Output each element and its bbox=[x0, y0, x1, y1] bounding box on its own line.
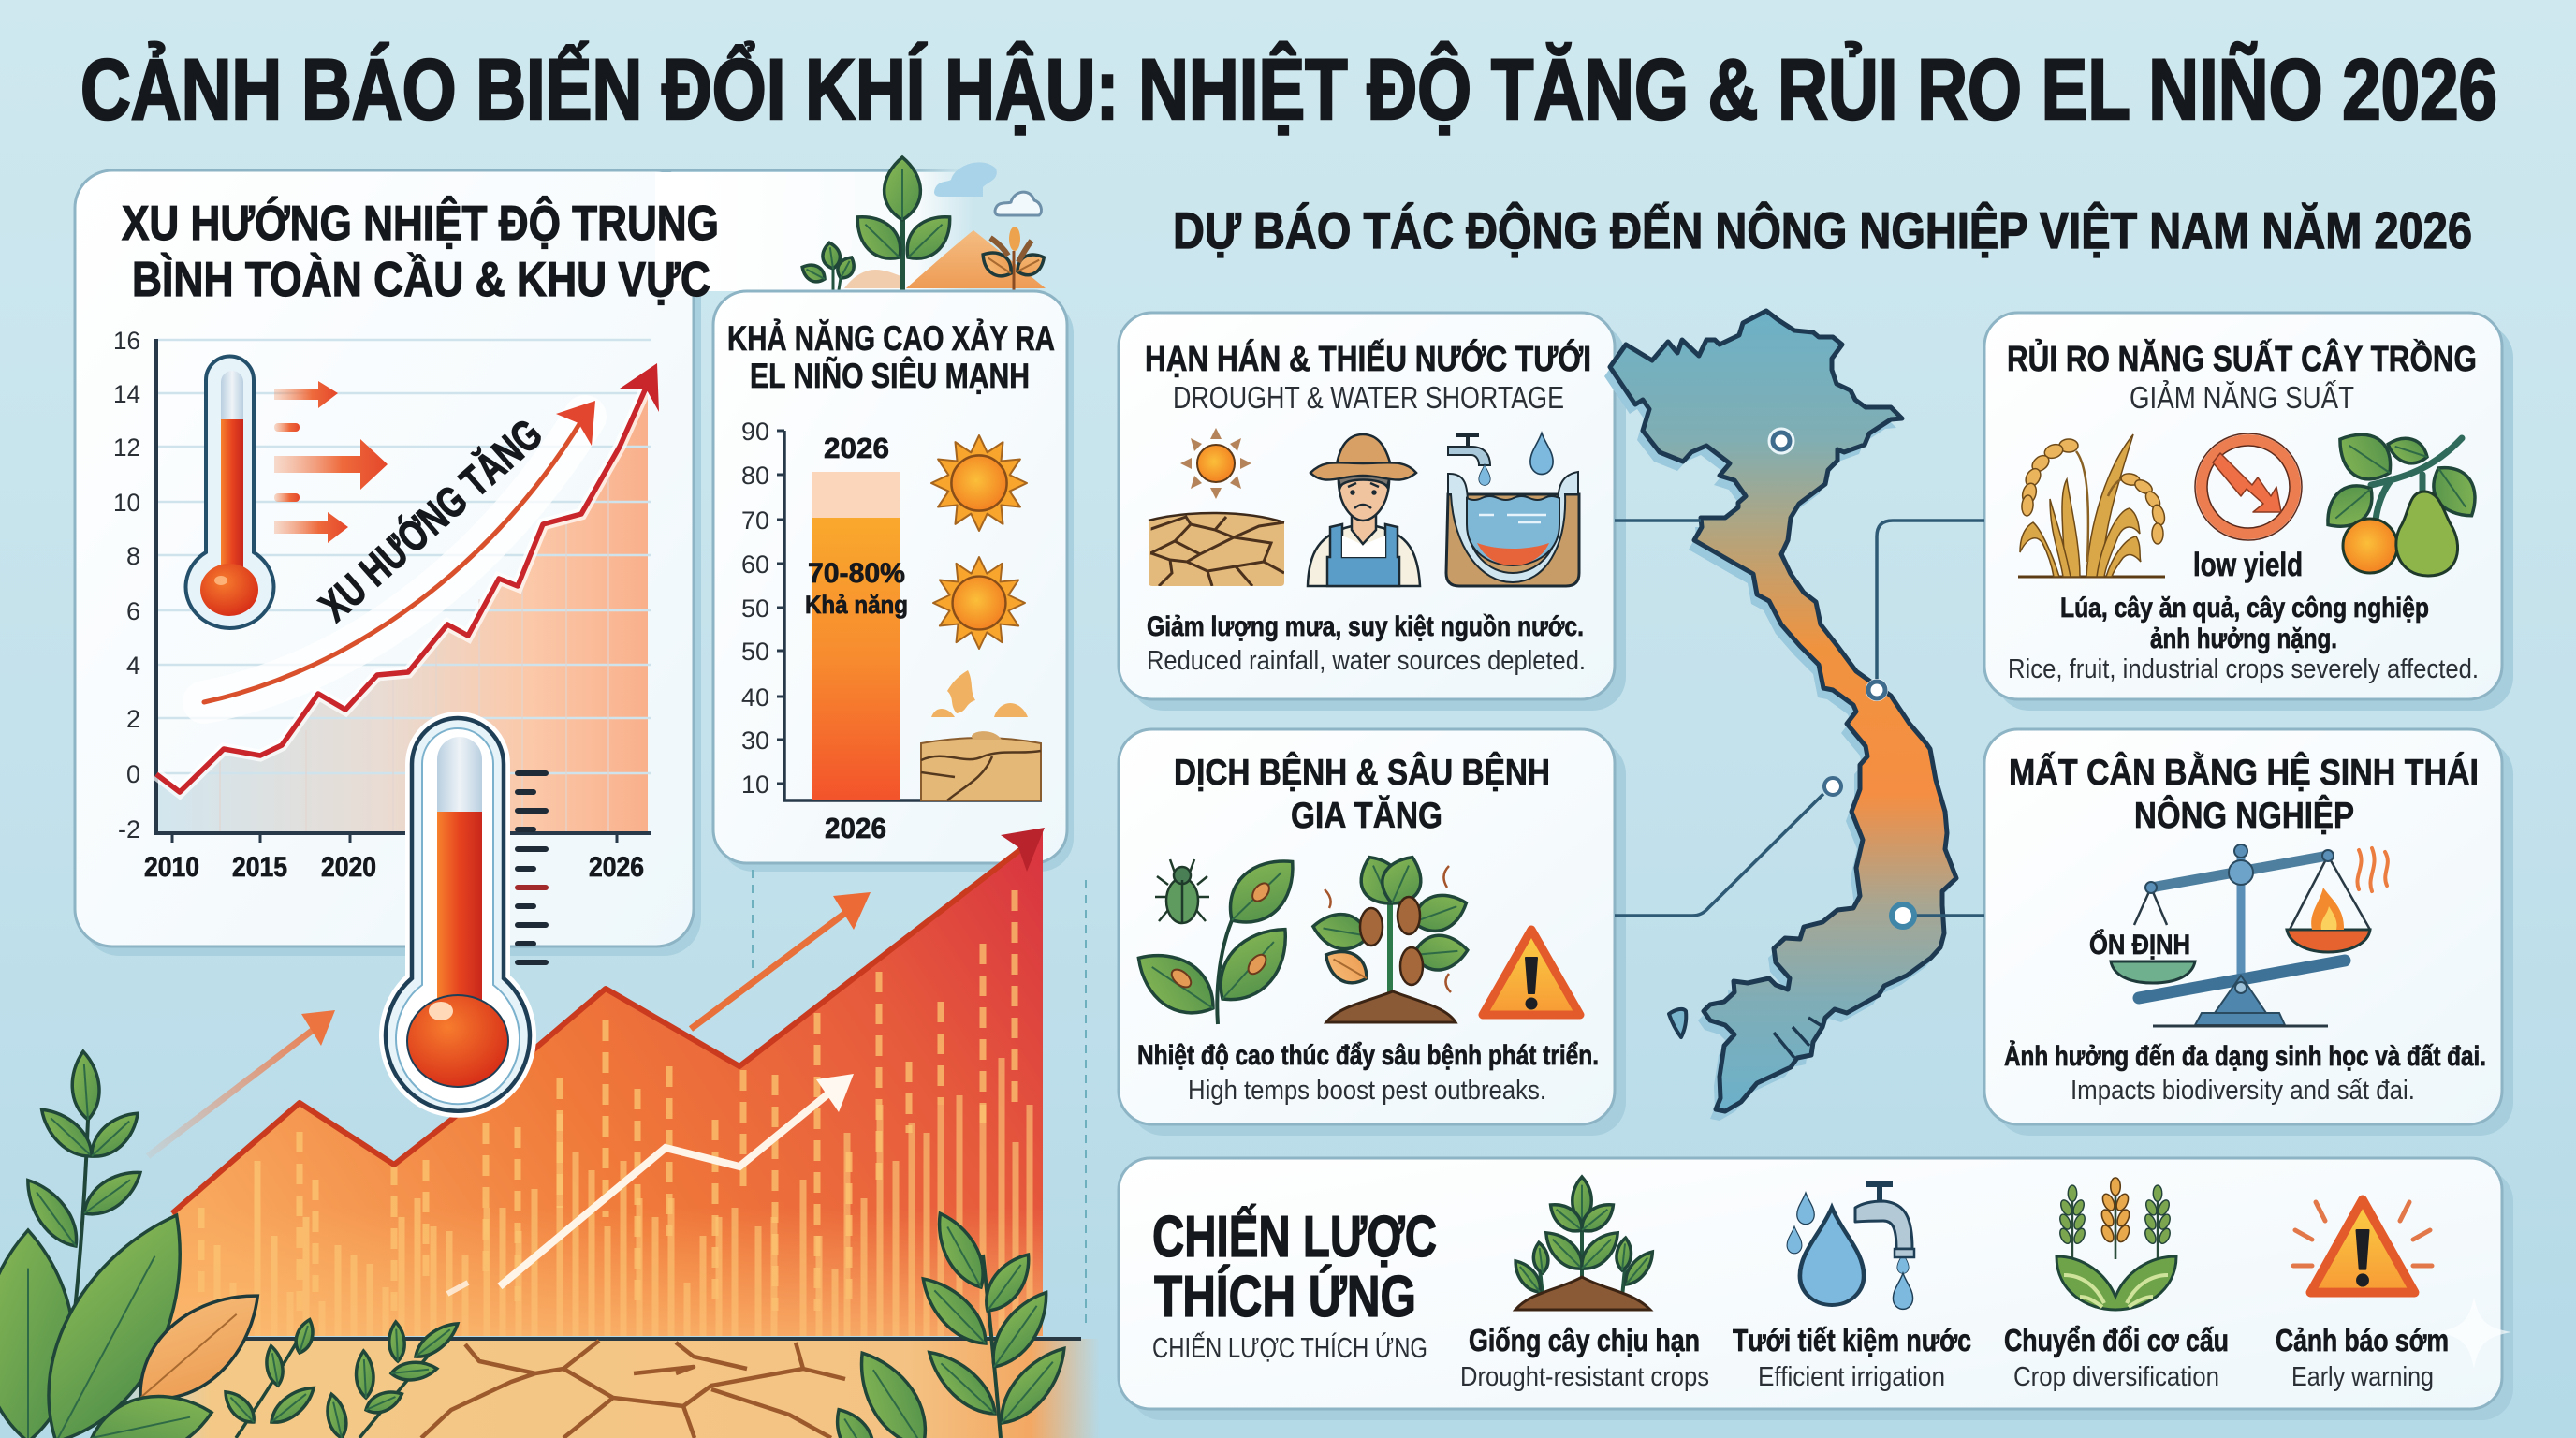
heading: temperature trend: XU HƯỚNG NHIỆT ĐỘ TRUNG bbox=[122, 196, 719, 251]
decorative bars bbox=[201, 890, 1030, 1336]
bar chart: probability 2026: 70-80% bbox=[808, 558, 905, 589]
illustration: small seedlings bbox=[219, 1317, 463, 1438]
label: efficient irrigation: Tưới tiết kiệm nước bbox=[1733, 1323, 1971, 1357]
body text: yield: Lúa, cây ăn quả, cây công nghiệp bbox=[2060, 593, 2429, 624]
icon: depleted water source and tap bbox=[1446, 433, 1579, 586]
panel: drought and water shortage bbox=[1119, 313, 1626, 711]
bar chart: probability 2026: 80 bbox=[741, 462, 769, 490]
icon: red heat arrows bbox=[274, 381, 388, 543]
illustration: cracked earth bbox=[112, 1339, 1100, 1438]
y axis labels: 2 bbox=[126, 705, 140, 733]
arrow: white trend bbox=[447, 1074, 854, 1294]
x axis labels: 2010 bbox=[144, 852, 199, 883]
thermometer scale ticks bbox=[518, 773, 546, 962]
icon: sun over cracked soil bbox=[1149, 428, 1284, 586]
y axis labels: 14 bbox=[113, 380, 140, 408]
icon: no-growth sign bbox=[2195, 433, 2302, 540]
bar chart: probability 2026: 50 bbox=[741, 638, 769, 666]
y axis labels: 8 bbox=[126, 542, 140, 570]
panel: crop yield risk bbox=[1984, 313, 2513, 711]
label: drought-resistant crops bbox=[1460, 1323, 1709, 1392]
label: stable: ỔN ĐỊNH bbox=[2089, 929, 2190, 961]
y axis labels: 4 bbox=[126, 652, 140, 680]
curved trend arrow bbox=[204, 401, 595, 702]
body text: yield: ảnh hưởng nặng. bbox=[2150, 624, 2337, 654]
heading: adaptation strategy: THÍCH ỨNG bbox=[1154, 1265, 1416, 1329]
panel: pests and disease bbox=[1119, 729, 1626, 1136]
y axis labels: 0 bbox=[126, 760, 140, 788]
body text: ecosystem: Impacts biodiversity and sất đai. bbox=[2071, 1076, 2415, 1106]
bar chart: probability 2026: 60 bbox=[741, 550, 769, 579]
y axis labels: 16 bbox=[113, 327, 140, 355]
y axis labels: 6 bbox=[126, 597, 140, 625]
white extension behind plant decoration bbox=[655, 172, 973, 291]
bar chart: probability 2026 bbox=[741, 418, 1042, 844]
label: rising trend: XU HƯỚNG TĂNG bbox=[310, 409, 551, 630]
icon: dry earth bbox=[921, 670, 1041, 800]
bar chart: probability 2026: 10 bbox=[741, 770, 769, 799]
heading: temperature trend: BÌNH TOÀN CẦU & KHU VỰC bbox=[132, 252, 710, 307]
label: drought-resistant crops: Giống cây chịu hạn bbox=[1469, 1323, 1700, 1357]
label: early warning: Cảnh báo sớm bbox=[2276, 1323, 2449, 1357]
icon: early warning bbox=[2293, 1199, 2432, 1293]
y axis labels: -2 bbox=[118, 815, 140, 844]
label: crop diversification bbox=[2004, 1323, 2229, 1392]
panel: ecosystem imbalance bbox=[1984, 729, 2513, 1136]
panel: El Nino probability bbox=[713, 291, 1074, 872]
arrow: pale rising bbox=[148, 1010, 335, 1156]
bar chart: probability 2026: 90 bbox=[741, 418, 769, 446]
y axis labels: 12 bbox=[113, 433, 140, 462]
label: efficient irrigation: Efficient irrigation bbox=[1758, 1362, 1945, 1392]
subheading: reduced yield: GIẢM NĂNG SUẤT bbox=[2130, 380, 2354, 415]
icon: small thermometer bbox=[185, 356, 273, 628]
icon: beetle bbox=[1155, 859, 1209, 923]
icon: fruit branch bbox=[2317, 421, 2487, 576]
bar chart: probability 2026: 70 bbox=[741, 506, 769, 535]
bar chart: probability 2026: 2026 bbox=[824, 432, 889, 464]
bar chart: probability 2026: 2026 bbox=[825, 812, 886, 844]
label: crop diversification: Crop diversification bbox=[2013, 1362, 2219, 1392]
line chart: temperature 2010-2026 bbox=[113, 327, 659, 883]
icon: sun bbox=[931, 435, 1027, 531]
icon: large thermometer bbox=[386, 718, 546, 1111]
label: drought-resistant crops: Drought-resistant crops bbox=[1460, 1362, 1709, 1392]
body text: drought bbox=[1147, 611, 1586, 676]
decoration: seedling, mound and clouds bbox=[798, 157, 1048, 290]
panel: adaptation strategies bbox=[1119, 1158, 2513, 1420]
bar chart: probability 2026: 30 bbox=[741, 726, 769, 755]
icon: rice plant bbox=[2018, 434, 2167, 577]
x axis labels bbox=[144, 852, 644, 883]
illustration: left plants bbox=[0, 1050, 280, 1438]
illustration: right plant bbox=[827, 1206, 1076, 1438]
icon: tilted balance scale bbox=[2111, 844, 2388, 1026]
heading: yield risk: RỦI RO NĂNG SUẤT CÂY TRỒNG bbox=[2007, 338, 2477, 379]
label: efficient irrigation bbox=[1733, 1323, 1971, 1392]
map: Vietnam bbox=[1604, 311, 1956, 1121]
x axis labels: 2015 bbox=[232, 852, 287, 883]
bar chart: probability 2026: Khả năng bbox=[805, 591, 908, 619]
label: early warning: Early warning bbox=[2291, 1362, 2434, 1392]
x axis labels: 2026 bbox=[589, 852, 644, 883]
icon: water-saving tap and drops bbox=[1787, 1184, 1914, 1309]
heading: super El Nino likelihood: KHẢ NĂNG CAO XẢY RA bbox=[727, 319, 1055, 358]
icon: sun small bbox=[933, 557, 1025, 649]
bar chart: probability 2026: 50 bbox=[741, 594, 769, 623]
label: crop diversification: Chuyển đổi cơ cấu bbox=[2004, 1323, 2229, 1357]
panel: global temperature trend bbox=[75, 170, 973, 956]
heading: pests: DỊCH BỆNH & SÂU BỆNH bbox=[1174, 752, 1550, 793]
subheading: adaptation strategy: CHIẾN LƯỢC THÍCH ỨNG bbox=[1152, 1331, 1427, 1364]
connectors between map and cards bbox=[1615, 521, 1984, 916]
heading: pests: GIA TĂNG bbox=[1291, 795, 1442, 836]
body text: pests bbox=[1137, 1040, 1599, 1106]
heading: temperature trend bbox=[122, 196, 719, 307]
subheading: drought english: DROUGHT & WATER SHORTAGE bbox=[1173, 380, 1564, 415]
body text: pests: High temps boost pest outbreaks. bbox=[1188, 1076, 1546, 1106]
body text: drought: Reduced rainfall, water sources depleted. bbox=[1147, 646, 1586, 676]
label: low yield: low yield bbox=[2193, 547, 2303, 583]
icon: diseased crop bbox=[1310, 849, 1472, 1022]
body text: yield bbox=[2008, 593, 2479, 684]
body text: drought: Giảm lượng mưa, suy kiệt nguồn nước. bbox=[1147, 611, 1584, 642]
dashed guide lines bbox=[753, 870, 1086, 1329]
heading: ecosystem bbox=[2009, 752, 2479, 836]
icon: infested leaves bbox=[1125, 844, 1309, 1028]
body text: yield: Rice, fruit, industrial crops severely affected. bbox=[2008, 654, 2479, 684]
arrow: orange rising bbox=[691, 892, 871, 1029]
icon: worried farmer bbox=[1308, 434, 1420, 586]
icon: crop diversification bbox=[2056, 1178, 2176, 1310]
decorative sparkle bbox=[2437, 1297, 2511, 1369]
heading: drought: HẠN HÁN & THIẾU NƯỚC TƯỚI bbox=[1145, 338, 1591, 379]
y axis labels: 10 bbox=[113, 489, 140, 517]
heading: pests bbox=[1174, 752, 1550, 836]
y axis labels bbox=[113, 327, 140, 844]
bar chart: probability 2026: 40 bbox=[741, 683, 769, 712]
heading: ecosystem: NÔNG NGHIỆP bbox=[2134, 794, 2354, 836]
icon: warning triangle bbox=[1483, 930, 1580, 1015]
body text: ecosystem bbox=[2004, 1040, 2486, 1106]
heading: adaptation strategy: CHIẾN LƯỢC bbox=[1152, 1205, 1437, 1269]
label: early warning bbox=[2276, 1323, 2449, 1392]
body text: pests: Nhiệt độ cao thúc đẩy sâu bệnh phát triển. bbox=[1137, 1040, 1599, 1071]
heading: ecosystem: MẤT CÂN BẰNG HỆ SINH THÁI bbox=[2009, 752, 2479, 793]
heading: adaptation strategy bbox=[1152, 1205, 1437, 1329]
icon: drought-resistant seedling bbox=[1510, 1177, 1659, 1310]
map markers bbox=[1769, 429, 1914, 927]
chart: rising orange area with arrow bbox=[144, 828, 1045, 1336]
heading: super El Nino likelihood bbox=[727, 319, 1055, 395]
x axis labels: 2020 bbox=[321, 852, 376, 883]
heading: super El Nino likelihood: EL NIÑO SIÊU MẠNH bbox=[750, 356, 1030, 395]
